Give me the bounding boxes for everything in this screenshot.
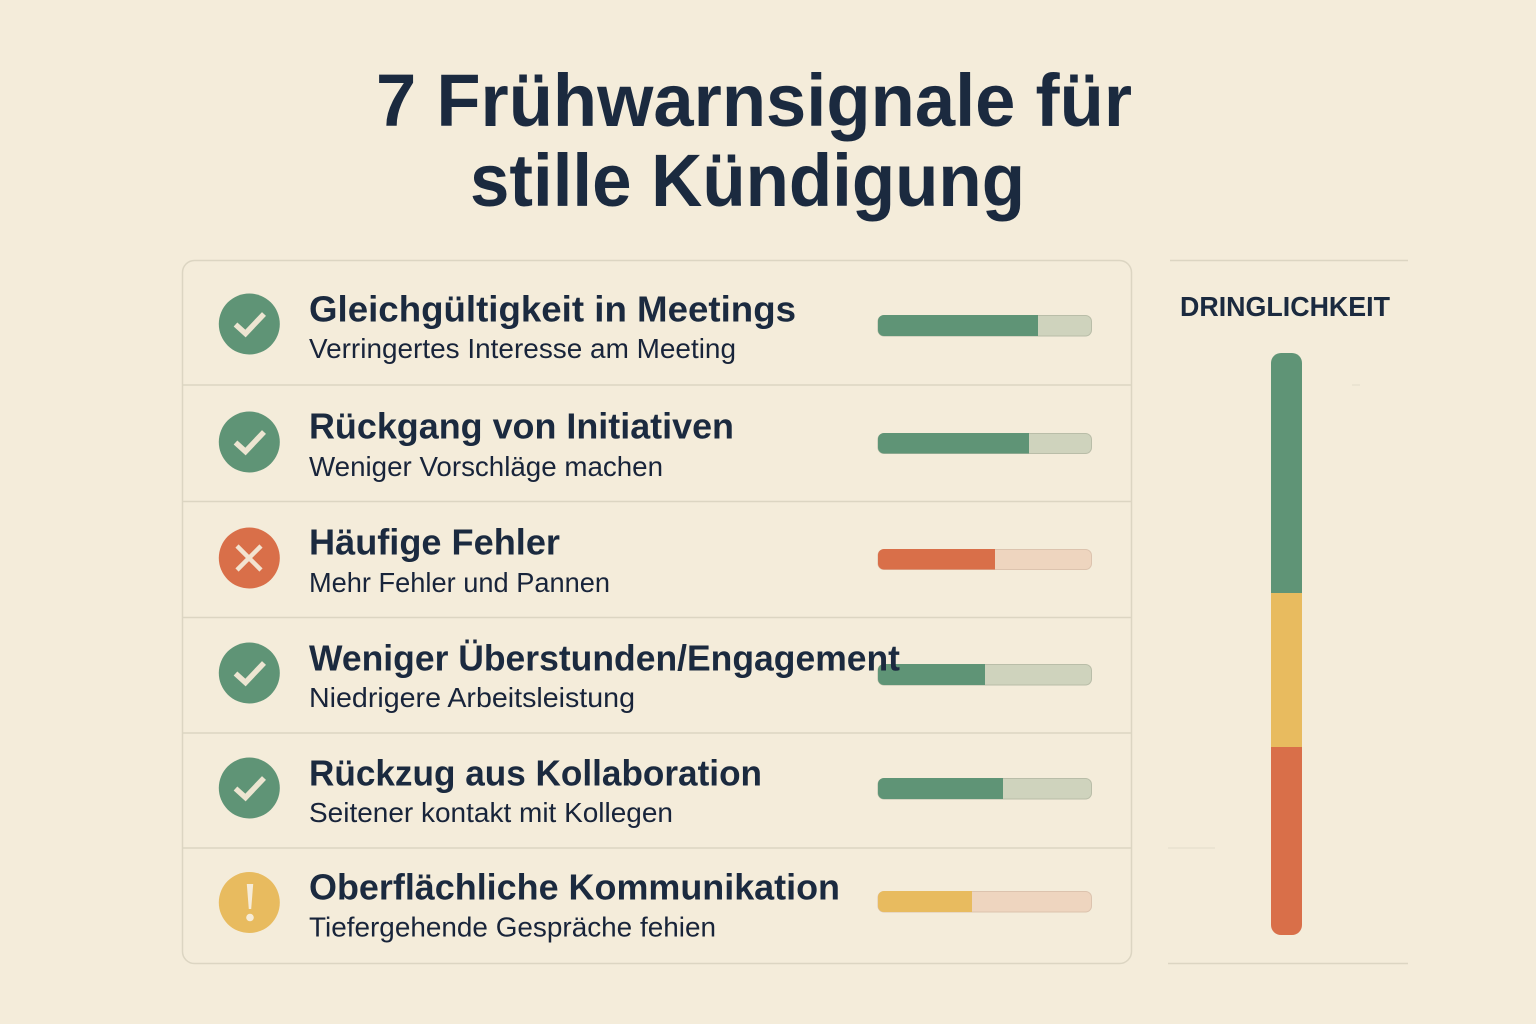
heading: Häufige Fehler <box>309 521 560 562</box>
icon: check <box>219 642 280 704</box>
row 1: Gleichgültigkeit in Meetings <box>219 288 1092 364</box>
progress bar <box>878 315 1092 336</box>
heading: Rückgang von Initiativen <box>309 405 734 446</box>
row 4: Weniger Überstunden/Engagement <box>219 637 1092 713</box>
heading: DRINGLICHKEIT: DRINGLICHKEIT <box>1180 291 1390 322</box>
description: Weniger Vorschläge machen <box>309 451 663 482</box>
description: Mehr Fehler und Pannen <box>309 567 610 598</box>
row 6: Oberflächliche Kommunikation <box>219 866 1092 942</box>
description: Tiefergehende Gespräche fehien <box>309 912 716 942</box>
title: 7 Frühwarnsignale für <box>376 59 1132 142</box>
vertical urgency bar <box>1271 353 1302 935</box>
description: Niedrigere Arbeitsleistung <box>309 682 635 713</box>
panel: urgency scale <box>1168 260 1408 964</box>
progress bar <box>878 664 1092 685</box>
description: Verringertes Interesse am Meeting <box>309 333 736 364</box>
heading: Gleichgültigkeit in Meetings <box>309 288 796 329</box>
title <box>376 59 1132 222</box>
progress bar <box>878 433 1092 454</box>
panel: warning signals list <box>182 260 1132 964</box>
icon: cross <box>219 528 280 588</box>
heading: Rückzug aus Kollaboration <box>309 752 762 793</box>
progress bar <box>878 549 1092 570</box>
progress bar <box>878 891 1092 912</box>
icon: warning <box>219 872 280 933</box>
row 2: Rückgang von Initiativen <box>219 405 1092 482</box>
row 3: Häufige Fehler <box>219 521 1092 598</box>
icon: check <box>219 294 280 354</box>
title: stille Kündigung <box>470 139 1025 222</box>
icon: check <box>219 758 280 818</box>
heading: Weniger Überstunden/Engagement <box>309 637 900 678</box>
description: Seitener kontakt mit Kollegen <box>309 797 673 828</box>
progress bar <box>878 778 1092 799</box>
heading: Oberflächliche Kommunikation <box>309 866 840 907</box>
icon: check <box>219 412 280 472</box>
row 5: Rückzug aus Kollaboration <box>219 752 1092 828</box>
